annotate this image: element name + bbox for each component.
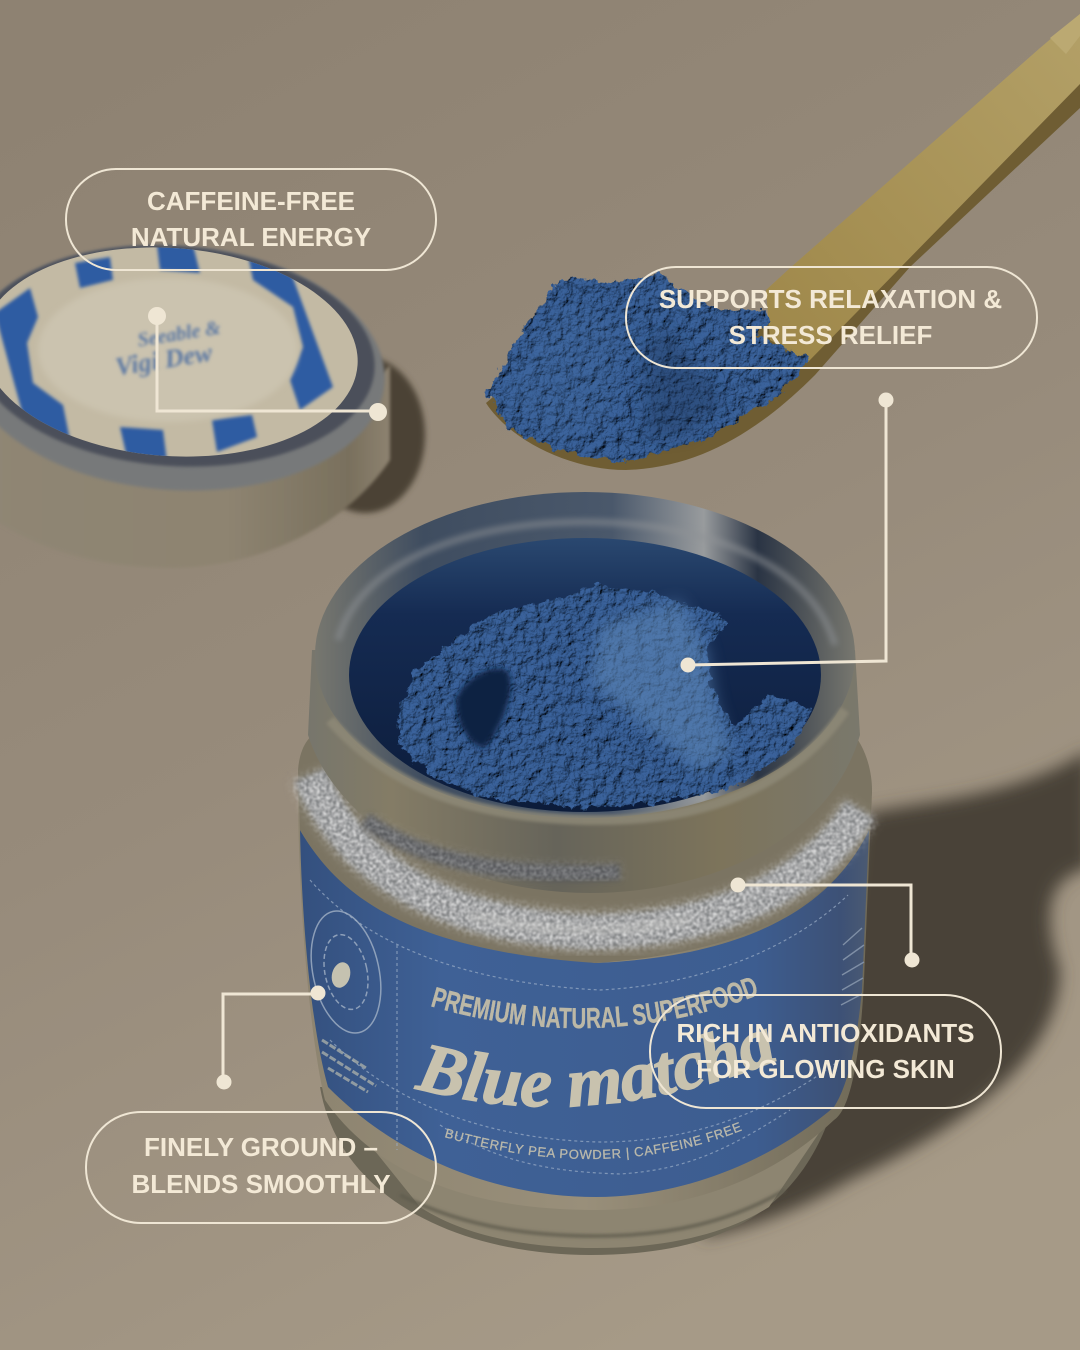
callout: finely ground blends smoothly: BLENDS SMOOTHLY [131,1169,391,1199]
callout: rich in antioxidants for glowing skin: FOR GLOWING SKIN [696,1054,955,1084]
callout: finely ground blends smoothly [85,1111,437,1224]
label dotted frame [310,880,848,1174]
jar well [349,538,821,812]
jar rim [315,492,855,818]
jar shadow [700,750,1080,1238]
bamboo spoon [486,14,1080,470]
label side hatching [841,928,864,1005]
connector: caffeine-free [148,307,387,421]
jar shoulder [298,730,872,963]
connector: antioxidants [730,878,920,968]
callout: rich in antioxidants for glowing skin [649,994,1002,1109]
jar body [298,752,872,1210]
callout: supports relaxation and stress relief: STRESS RELIEF [729,320,932,350]
label brand: Blue matcha [413,1028,777,1108]
spoon powder [487,272,808,462]
callout: supports relaxation and stress relief [625,266,1038,369]
open jar [292,492,880,1255]
lid shadow [305,357,425,513]
powder slope [590,600,732,772]
tin lid [0,232,393,568]
label badge [301,904,391,1092]
powder crater [456,668,511,748]
jar base [320,1087,835,1255]
label heading: PREMIUM NATURAL SUPERFOOD [431,978,757,1029]
callout: supports relaxation and stress relief: SUPPORTS RELAXATION & [659,284,1002,314]
lid lettering: Seeable & [136,317,223,351]
callout: caffeine-free natural energy [65,168,437,271]
lid lettering [113,317,223,382]
jar powder [399,585,812,808]
callout: finely ground blends smoothly: FINELY GROUND – [144,1132,378,1162]
callout: rich in antioxidants for glowing skin: RICH IN ANTIOXIDANTS [676,1018,975,1048]
callout: caffeine-free natural energy: NATURAL ENERGY [131,222,371,252]
connector: finely ground [216,986,326,1090]
connector: relaxation [680,392,894,672]
label subtitle: BUTTERFLY PEA POWDER | CAFFEINE FREE [445,1122,742,1160]
callout: caffeine-free natural energy: CAFFEINE-FREE [147,186,355,216]
printed label [300,830,869,1197]
lid lettering: Vigi Dew [113,338,215,382]
shoulder highlight [310,775,860,932]
jar neck [308,650,860,893]
